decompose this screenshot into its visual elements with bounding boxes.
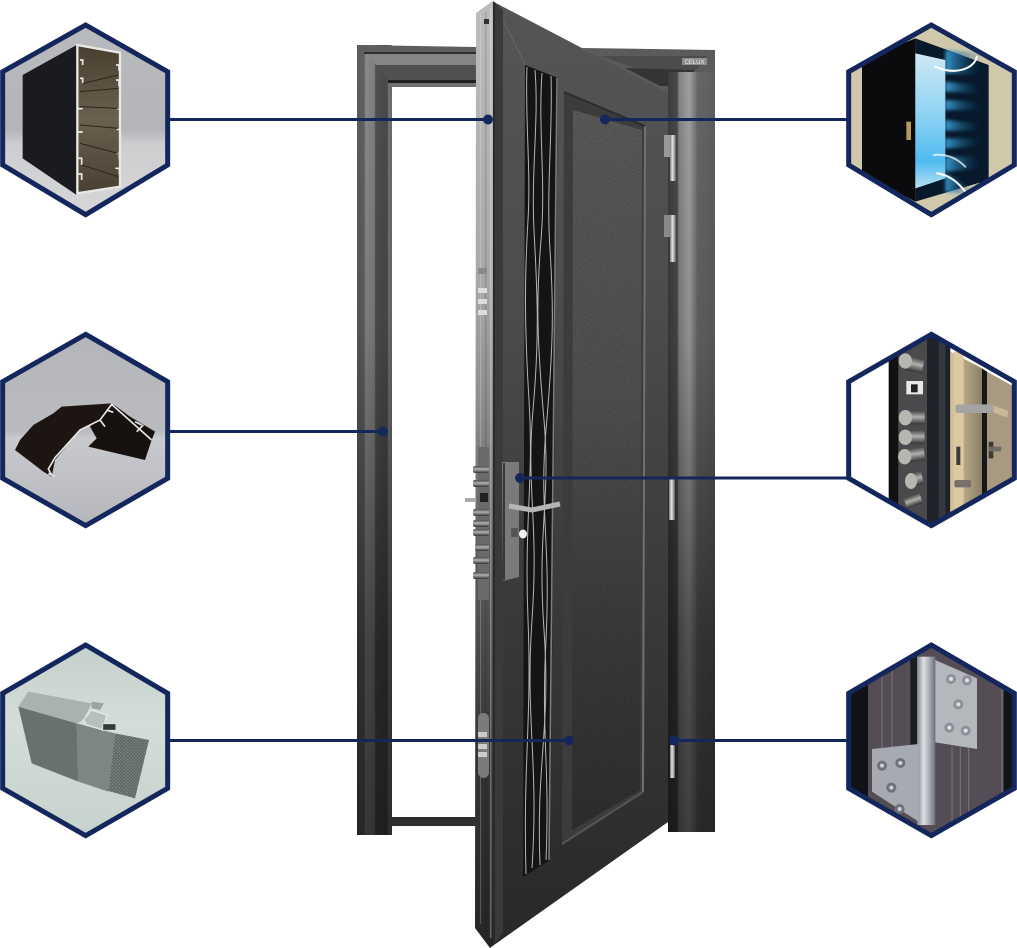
panel grooves xyxy=(882,668,1002,822)
bolts xyxy=(898,353,925,509)
brand plate xyxy=(682,58,707,66)
glowing doorway xyxy=(915,53,945,188)
hinges xyxy=(664,135,676,778)
upper lock bolts xyxy=(478,268,487,315)
extrusion front section xyxy=(15,403,112,477)
connector: top left xyxy=(168,114,493,124)
connector: middle right xyxy=(515,473,850,483)
profile body xyxy=(18,707,78,782)
lower hinge leaf xyxy=(872,744,919,822)
frame: top bar right xyxy=(582,48,715,95)
hexagon: airflow door xyxy=(844,20,1017,220)
lever handle xyxy=(954,404,1009,487)
frame: right jamb xyxy=(668,72,715,832)
connector: middle left xyxy=(168,426,388,436)
door frame xyxy=(357,45,715,835)
profile rib xyxy=(77,723,115,792)
hexagon: grey thermal profile xyxy=(0,642,173,842)
lock plate with bolts xyxy=(465,447,489,600)
connector: bottom right xyxy=(669,736,850,746)
connector lines xyxy=(168,114,850,746)
profile tubes xyxy=(83,710,107,730)
profile outer black side xyxy=(23,45,77,195)
door panel xyxy=(562,92,645,844)
glass strip xyxy=(523,65,558,877)
connector: bottom left xyxy=(168,736,574,746)
profile open end xyxy=(77,45,120,193)
door face xyxy=(494,2,668,945)
brand plate: CELUX xyxy=(684,60,705,66)
frame: threshold xyxy=(390,817,476,826)
door handle and plate xyxy=(502,462,560,581)
extrusion rear section xyxy=(88,404,155,460)
profile perforated side xyxy=(108,733,149,798)
hexagon: multi-point lock bolts xyxy=(844,332,1017,532)
connector: top right xyxy=(600,114,850,124)
black door xyxy=(862,38,915,202)
frame: left jamb xyxy=(357,45,392,835)
hexagon: steel hinge xyxy=(844,642,1017,842)
door inner edge bevel xyxy=(494,2,503,945)
door leaf xyxy=(465,0,676,948)
hinge knuckle xyxy=(917,657,935,825)
airflow arrows xyxy=(934,57,977,192)
hexagon: black extrusion profile xyxy=(0,332,173,532)
hexagon: hollow aluminium profile xyxy=(0,20,173,220)
door lock edge xyxy=(475,0,494,948)
upper hinge leaf xyxy=(935,660,977,749)
door beige surface xyxy=(950,352,982,528)
blue air streams xyxy=(945,50,980,195)
lock plate xyxy=(906,122,911,140)
door edge stripes xyxy=(480,2,495,944)
dark door gap left xyxy=(851,685,868,796)
frame: top bar left xyxy=(357,45,476,87)
door edge xyxy=(888,356,899,504)
lower lock xyxy=(478,713,489,778)
door open leaf xyxy=(915,38,989,202)
door: mitre line xyxy=(503,20,526,66)
top edge screw hole xyxy=(484,19,489,24)
